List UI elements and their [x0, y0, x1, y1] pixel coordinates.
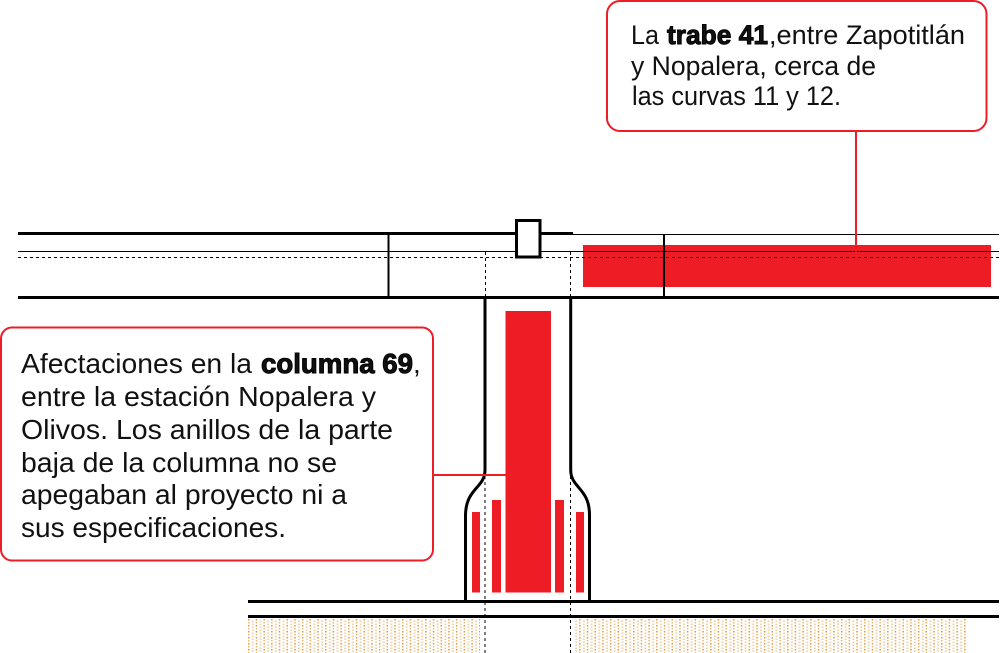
viaduct structure — [18, 233, 999, 298]
callout: columna 69: sus especificaciones. — [21, 512, 286, 543]
callout: trabe 41: trabe 41 — [667, 20, 768, 50]
callout: columna 69: Afectaciones en la — [21, 348, 252, 379]
ground texture — [248, 619, 968, 653]
red highlighted column: columna 69 — [472, 311, 584, 592]
column outline — [466, 297, 590, 602]
callout: trabe 41: las curvas 11 y 12. — [632, 81, 841, 111]
callout: trabe 41 — [607, 1, 986, 131]
callout: columna 69 — [1, 328, 433, 560]
callout: columna 69: entre la estación Nopalera y — [21, 381, 376, 412]
callout: trabe 41: y Nopalera, cerca de — [631, 51, 876, 81]
expansion joint box — [516, 220, 540, 257]
leader line: trabe — [855, 131, 857, 258]
dashed column axes — [485, 470, 570, 653]
callout: columna 69: baja de la columna no se — [21, 447, 337, 478]
foundation lines — [248, 602, 999, 616]
callout: trabe 41: La — [631, 20, 660, 50]
callout: columna 69: columna 69 — [261, 348, 413, 379]
leader line: columna — [433, 474, 506, 476]
red highlighted beam: trabe 41 — [583, 245, 991, 287]
callout: columna 69: , — [413, 348, 421, 379]
callout: columna 69: apegaban al proyecto ni a — [21, 479, 347, 510]
callout: columna 69: Olivos. Los anillos de la parte — [21, 414, 393, 445]
callout: trabe 41: ,entre Zapotitlán — [769, 20, 965, 50]
